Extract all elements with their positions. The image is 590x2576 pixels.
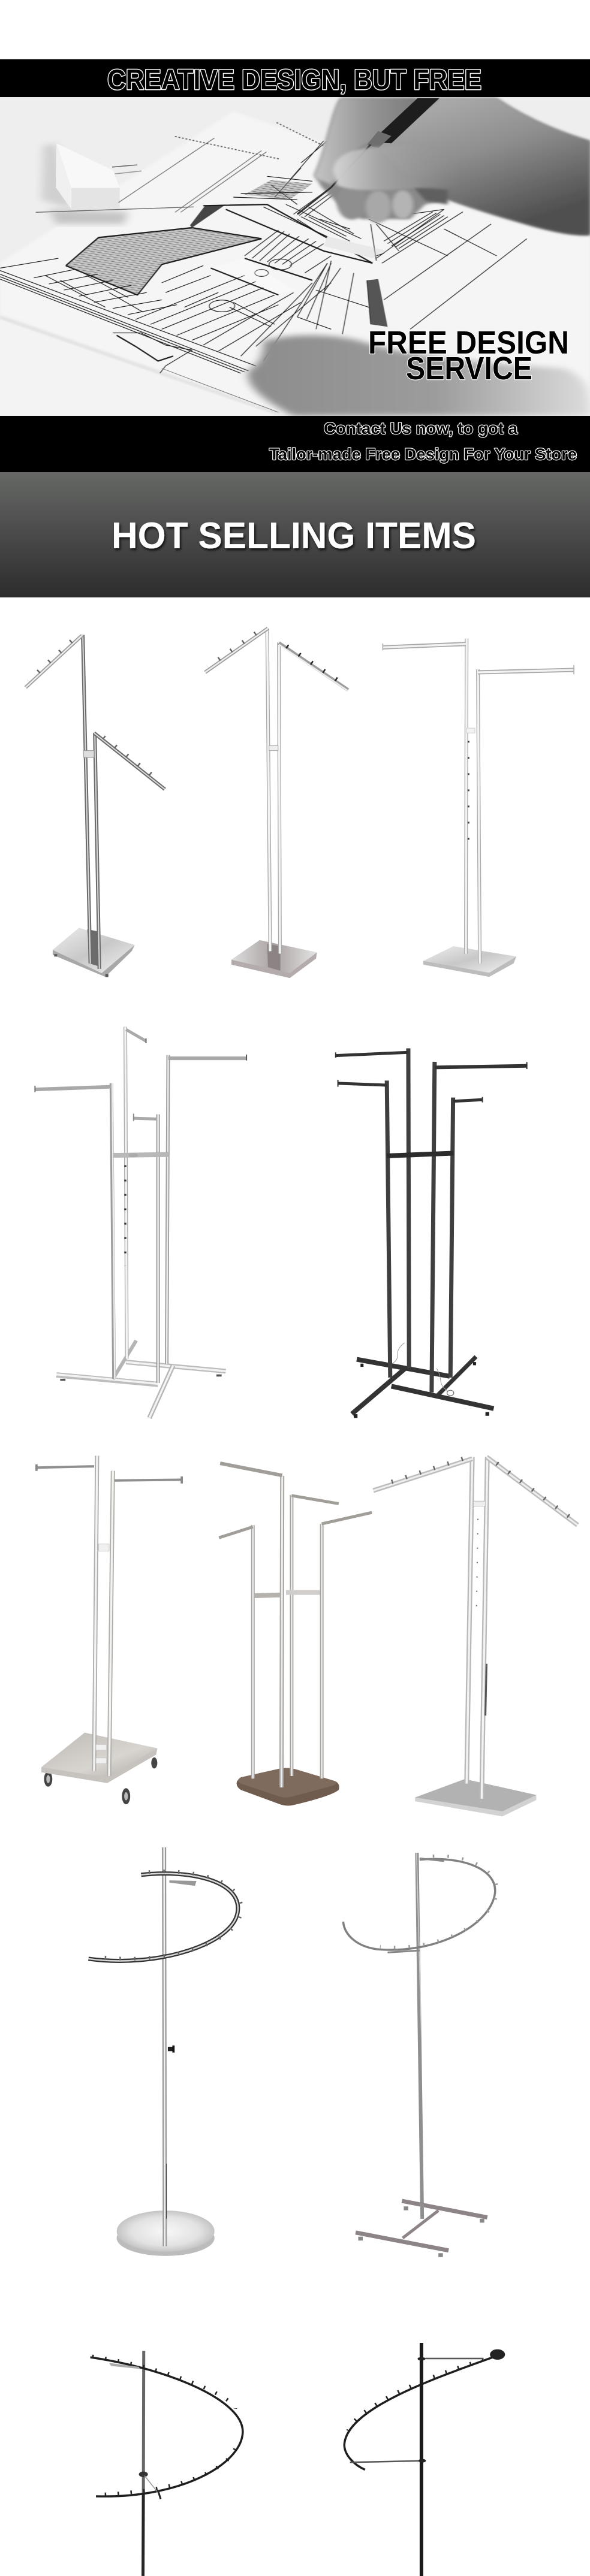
product: chrome spiral rack on round base: [88, 1847, 241, 2256]
panel: product row 4: [88, 1847, 497, 2257]
product: two-way straight arm rack: [383, 639, 574, 977]
sketch photograph: [0, 97, 590, 417]
product: black four-way rack: [336, 1049, 527, 1418]
panel: product row 5: [91, 2343, 505, 2576]
product: black spiral rack facing left: [344, 2343, 505, 2576]
text: tailor-made: Tailor-made Free Design For Your Store: [269, 445, 577, 463]
product: black spiral rack facing right: [91, 2351, 243, 2576]
icon: blurred resting hand: [248, 336, 590, 416]
panel: product row 2: [35, 1027, 527, 1418]
product: grey spiral rack on T-base: [343, 1853, 497, 2257]
panel: free design service hero: [0, 59, 590, 472]
heading: hot selling items: HOT SELLING ITEMS: [112, 515, 476, 557]
product: chrome four-way rack: [35, 1027, 246, 1418]
top banner bar: [0, 59, 590, 97]
panel: product row 1: [26, 629, 574, 978]
icon: eraser: [41, 143, 142, 224]
heading: service: SERVICE: [406, 351, 532, 386]
text: contact us: Contact Us now, to got a: [324, 419, 518, 437]
product: chrome two-way waterfall rack: [26, 635, 165, 977]
product: two-way waterfall rack on grey base: [374, 1457, 577, 1816]
panel: hot selling items header: [0, 472, 590, 597]
panel: product row 3: [35, 1455, 577, 1816]
heading: creative design: CREATIVE DESIGN, BUT FREE: [107, 64, 481, 95]
architectural sketch drawing: [0, 123, 527, 412]
heading: free design: FREE DESIGN: [368, 325, 569, 361]
product: two-way rack with black pegs: [205, 629, 348, 978]
icon: drawing hand with pencil: [297, 98, 590, 235]
product: rolling two-way rack: [35, 1455, 183, 1804]
bottom contact bar: [0, 416, 590, 472]
product: four-way rack on wood base: [219, 1463, 372, 1805]
